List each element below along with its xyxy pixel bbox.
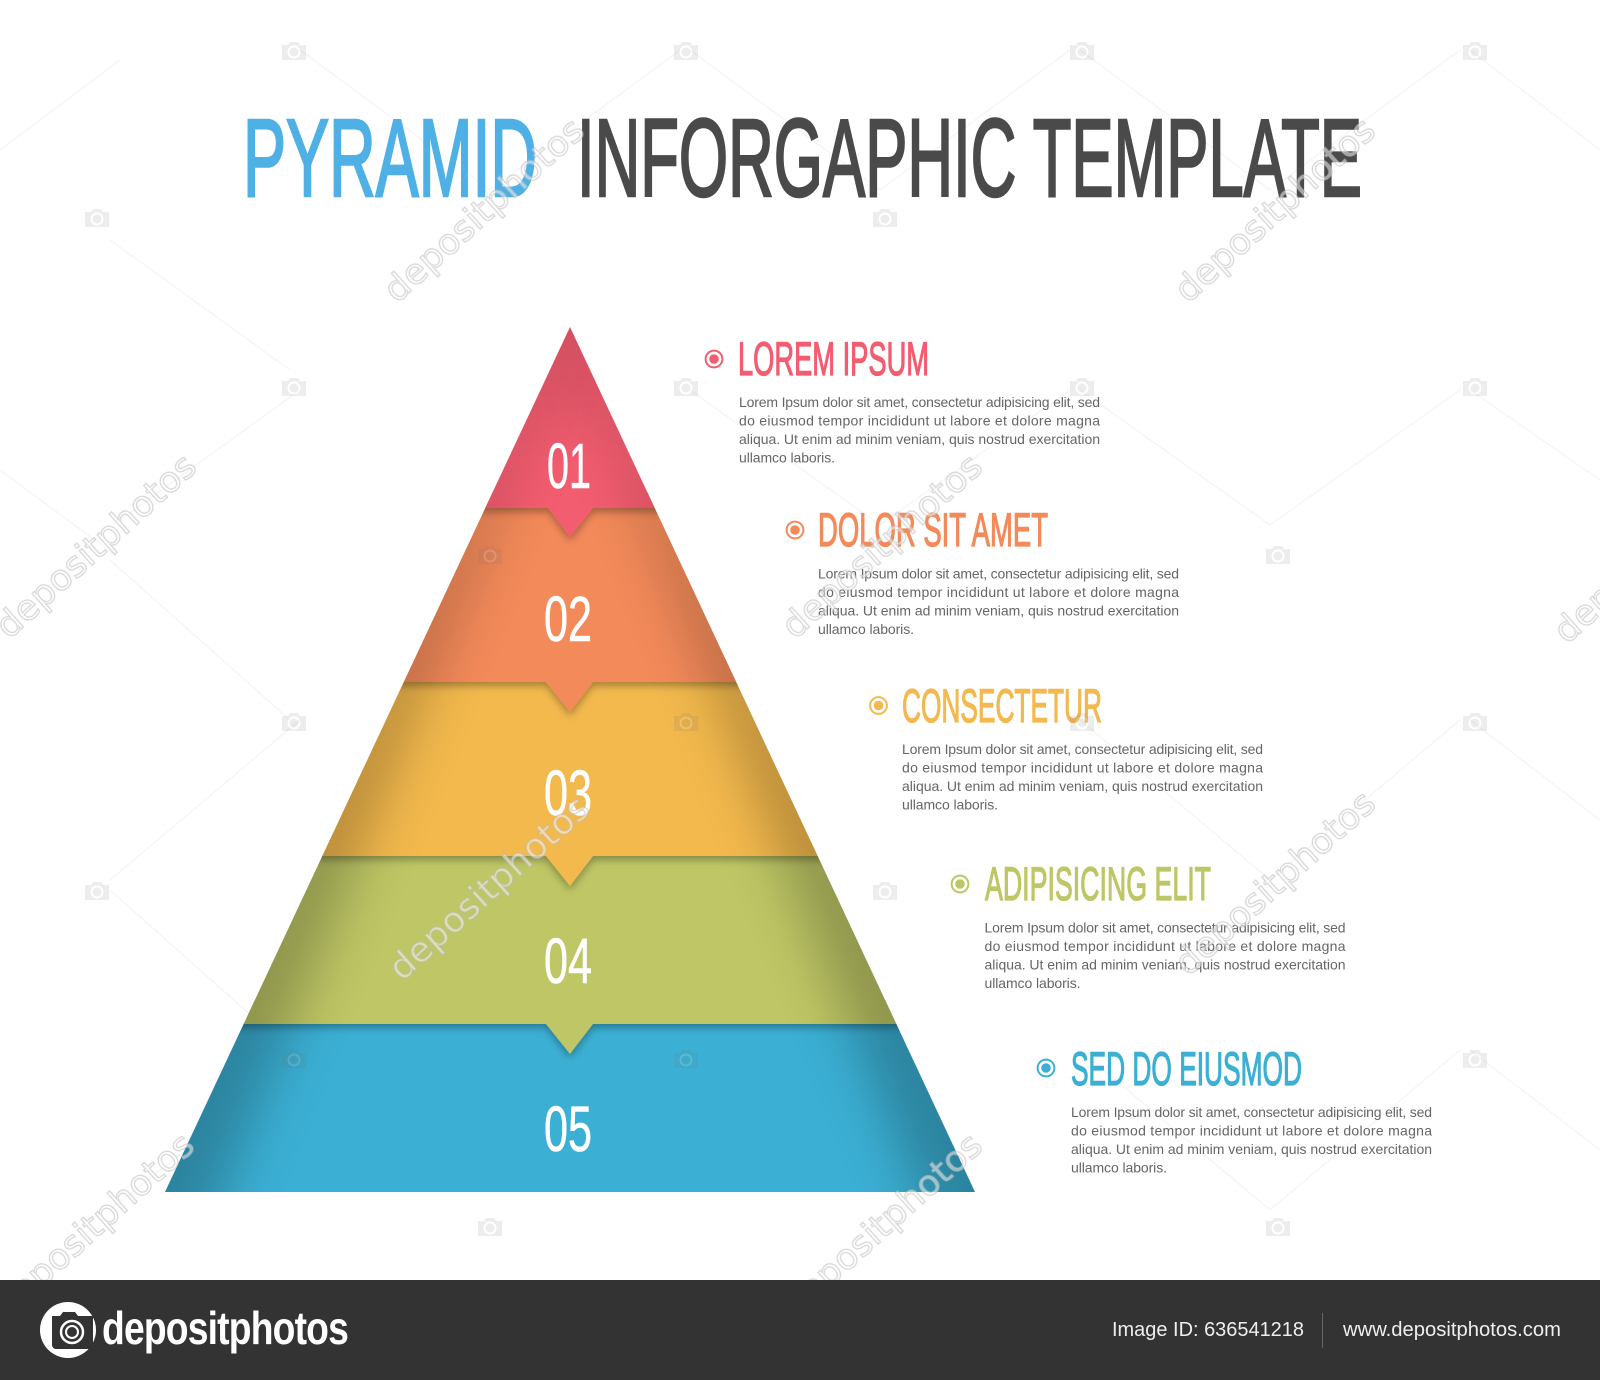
- number 05: 05: [544, 1093, 592, 1165]
- footer separator: [1322, 1313, 1323, 1348]
- left edge shade: [165, 374, 555, 1192]
- body 2: Lorem Ipsum dolor sit amet, consectetur adipisicing elit, sed: [818, 566, 1179, 582]
- heading 1: LOREM IPSUM: [738, 332, 929, 385]
- body 5: [1071, 1104, 1432, 1176]
- body 3: Lorem Ipsum dolor sit amet, consectetur adipisicing elit, sed: [902, 741, 1263, 757]
- body 1: do eiusmod tempor incididunt ut labore et dolore magna: [739, 412, 1100, 428]
- body 3: do eiusmod tempor incididunt ut labore et dolore magna: [902, 760, 1263, 776]
- pyramid: [165, 327, 975, 1192]
- title: [243, 97, 1362, 220]
- item 4: adipisicing elit: [952, 857, 1346, 991]
- band 04 green: [240, 840, 900, 1060]
- right edge shade: [585, 374, 975, 1192]
- band 02 orange: [400, 490, 740, 718]
- body 1: aliqua. Ut enim ad minim veniam, quis nostrud exercitation: [739, 431, 1100, 447]
- number 04: 04: [544, 925, 592, 997]
- website: www.depositphotos.com: [1342, 1319, 1561, 1341]
- item 5: sed do eiusmod: [1038, 1042, 1432, 1176]
- watermark text: depositphotos: [774, 1125, 991, 1326]
- pyramid bands: [165, 327, 975, 1192]
- body 1: [739, 394, 1100, 466]
- bullet 4: [952, 876, 968, 892]
- body 2: do eiusmod tempor incididunt ut labore et dolore magna: [818, 584, 1179, 600]
- heading 4: ADIPISICING ELIT: [985, 857, 1211, 910]
- item 1: lorem ipsum: [706, 332, 1100, 466]
- heading 2: DOLOR SIT AMET: [818, 503, 1048, 556]
- body 2: ullamco laboris.: [818, 621, 914, 637]
- body 5: aliqua. Ut enim ad minim veniam, quis nostrud exercitation: [1071, 1141, 1432, 1157]
- top fade on band 01: [532, 328, 608, 416]
- body 2: aliqua. Ut enim ad minim veniam, quis nostrud exercitation: [818, 602, 1179, 618]
- item 2: dolor sit amet: [787, 503, 1179, 637]
- body 1: ullamco laboris.: [739, 450, 835, 466]
- bullet 5: [1038, 1060, 1054, 1076]
- footer logo wordmark: depositphotos: [102, 1302, 348, 1354]
- body 3: aliqua. Ut enim ad minim veniam, quis nostrud exercitation: [902, 778, 1263, 794]
- body 2: [818, 566, 1179, 637]
- watermark camera icons: [85, 42, 1487, 1236]
- bullet 2: [787, 522, 803, 538]
- body 4: Lorem Ipsum dolor sit amet, consectetur adipisicing elit, sed: [984, 920, 1346, 936]
- watermark text: depositphotos: [1167, 110, 1384, 311]
- watermark text: depositphotos: [1167, 783, 1384, 984]
- footer logo icon: [40, 1302, 96, 1358]
- body 5: Lorem Ipsum dolor sit amet, consectetur adipisicing elit, sed: [1071, 1104, 1432, 1120]
- watermark text: depositphotos: [774, 446, 991, 647]
- body 3: [902, 741, 1263, 812]
- watermark text: depositphotos: [381, 788, 598, 989]
- footer bar: [0, 1280, 1600, 1380]
- body 4: [984, 920, 1346, 991]
- heading 3: CONSECTETUR: [902, 679, 1102, 732]
- band 03 yellow: [319, 665, 821, 892]
- bullet 3: [870, 697, 887, 714]
- image id: Image ID: 636541218: [1112, 1319, 1304, 1341]
- number 02: 02: [544, 583, 592, 655]
- bullet 1: [706, 351, 722, 367]
- body 1: Lorem Ipsum dolor sit amet, consectetur adipisicing elit, sed: [739, 394, 1100, 410]
- number 03: 03: [544, 757, 592, 829]
- body 4: ullamco laboris.: [984, 975, 1080, 991]
- item 3: consectetur: [870, 679, 1263, 812]
- body 5: ullamco laboris.: [1071, 1160, 1167, 1176]
- body 4: do eiusmod tempor incididunt ut labore et dolore magna: [984, 938, 1346, 954]
- title word: pyramid: PYRAMID: [243, 97, 537, 220]
- body 3: ullamco laboris.: [902, 796, 998, 812]
- band 05 blue: [165, 1000, 975, 1192]
- heading 5: SED DO EIUSMOD: [1071, 1042, 1302, 1095]
- body 4: aliqua. Ut enim ad minim veniam, quis nostrud exercitation: [984, 956, 1346, 972]
- watermark text: depositphotos: [376, 110, 593, 311]
- body 5: do eiusmod tempor incididunt ut labore et dolore magna: [1071, 1122, 1432, 1138]
- number 01: 01: [547, 430, 591, 502]
- band 01 red: [482, 327, 658, 543]
